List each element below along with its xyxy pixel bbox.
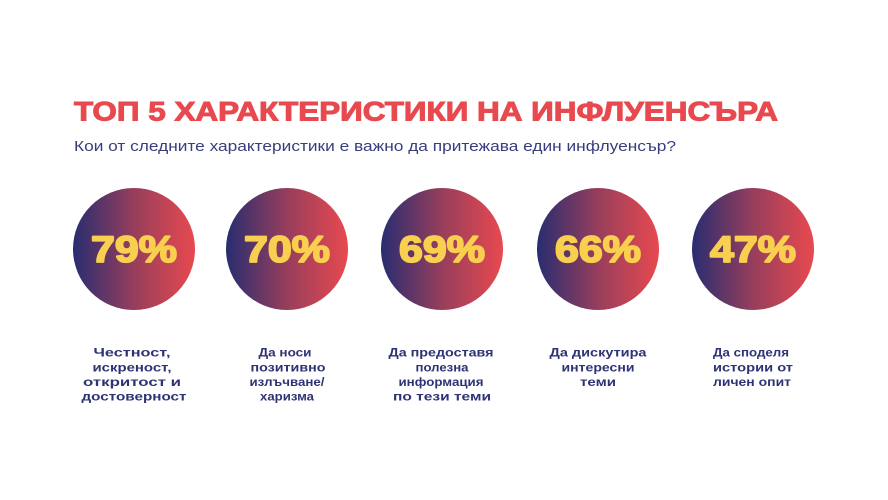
- label: 79%: Честност,: [94, 346, 170, 360]
- stat: 47%: 47%: [710, 229, 796, 270]
- stat: 66%: 66%: [555, 229, 641, 270]
- title: ТОП 5 ХАРАКТЕРИСТИКИ НА ИНФЛУЕНСЪРА: [74, 96, 778, 126]
- label: 69%: информация: [398, 375, 484, 389]
- label: 47%: [713, 346, 793, 389]
- label: 79%: искреност,: [92, 360, 172, 374]
- label: 70%: позитивно: [250, 360, 326, 374]
- label: 79%: достоверност: [82, 390, 187, 404]
- label: 66%: интересни: [562, 360, 634, 374]
- label: 47%: личен опит: [713, 375, 791, 389]
- subtitle: Кои от следните характеристики е важно да притежава един инфлуенсър?: [74, 138, 676, 155]
- label: 79%: откритост и: [83, 375, 181, 389]
- label: 69%: полезна: [416, 360, 469, 374]
- label: 70%: Да носи: [258, 346, 312, 360]
- stat: 47%: [692, 188, 814, 310]
- label: 69%: по тези теми: [393, 390, 491, 404]
- label: 70%: [250, 346, 326, 404]
- label: 79%: [82, 346, 187, 404]
- label: 66%: теми: [580, 375, 616, 389]
- label: 69%: [388, 346, 494, 404]
- label: 47%: Да споделя: [713, 346, 789, 360]
- label: 66%: Да дискутира: [550, 346, 647, 360]
- label: 69%: Да предоставя: [388, 346, 494, 360]
- stat: 70%: 70%: [244, 229, 330, 270]
- stat: 69%: 69%: [399, 229, 485, 270]
- stat: 66%: [537, 188, 659, 310]
- stat: 79%: [73, 188, 195, 310]
- label: 70%: излъчване/: [250, 375, 325, 389]
- label: 47%: истории от: [713, 360, 793, 374]
- stat: 70%: [226, 188, 348, 310]
- label: 66%: [550, 346, 647, 389]
- stat: 79%: 79%: [91, 229, 177, 270]
- label: 70%: харизма: [260, 390, 314, 404]
- stat: 69%: [381, 188, 503, 310]
